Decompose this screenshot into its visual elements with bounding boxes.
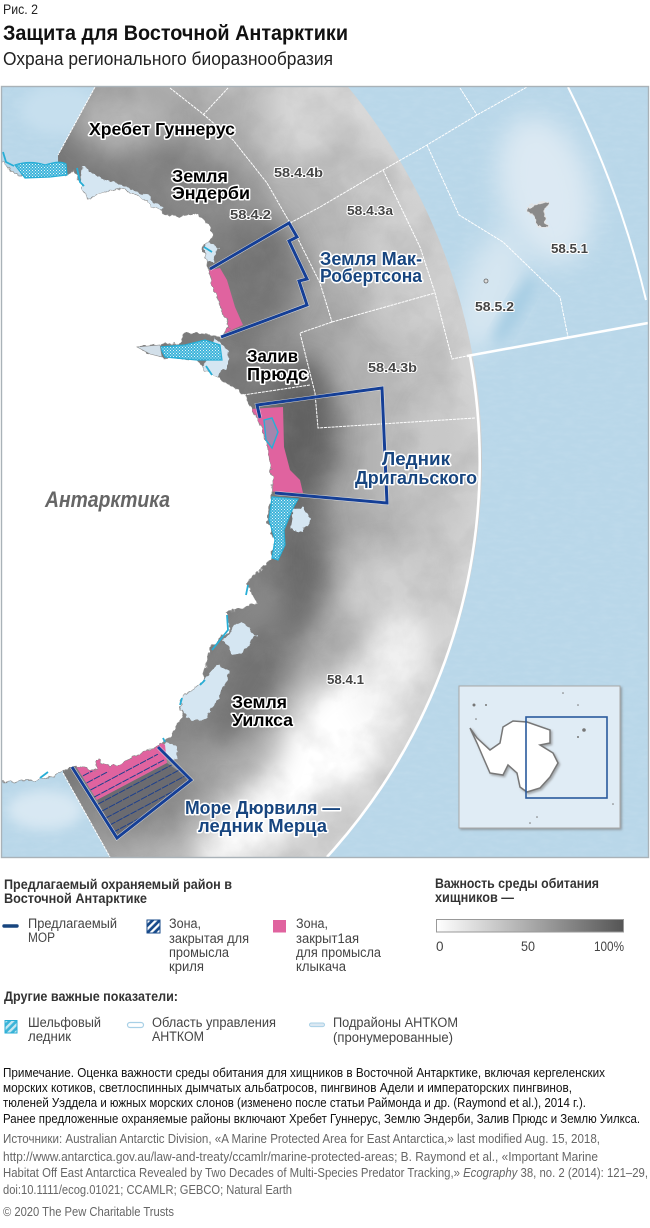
Antarctic land xyxy=(0,150,275,782)
CCAMLR management area lines xyxy=(327,87,648,857)
label: Prydz Bay xyxy=(247,346,308,384)
CCAMLR subarea lines xyxy=(58,87,568,857)
legend heading: Восточной Антарктике xyxy=(4,891,147,906)
map panel xyxy=(0,70,649,892)
legend: other features xyxy=(4,989,458,1045)
note: тюленей Уэддела и южных морских слонов (изменено после статьи Раймонда и др. (Raymond et al.), 2014 г.). xyxy=(3,1095,586,1110)
legend item: proposed MPA: Предлагаемый xyxy=(28,916,117,931)
subarea numbers: 58.4.2 xyxy=(230,208,271,222)
legend item: subareas: (пронумерованные) xyxy=(333,1030,453,1045)
legend item: ice shelf: Шельфовый xyxy=(28,1015,101,1030)
subarea numbers: 58.4.1 xyxy=(327,673,364,687)
Kerguelen Islands xyxy=(527,201,548,227)
legend heading: Предлагаемый охраняемый район в xyxy=(4,877,232,892)
legend item: krill closure: закрытая для xyxy=(169,931,249,946)
label: Wilkes Land xyxy=(232,692,293,730)
Amery west tip xyxy=(137,345,162,357)
legend: habitat importance scale xyxy=(435,876,624,954)
Heard Island xyxy=(484,279,488,283)
label: d'Urville Sea xyxy=(185,798,340,836)
seabed plateau shading xyxy=(3,88,606,834)
label: Drygalski Glacier xyxy=(355,449,477,488)
pink zone: d'Urville xyxy=(76,743,167,800)
legend item: management area xyxy=(128,1015,276,1044)
label: Prydz Bay: Прюдс xyxy=(247,364,308,384)
legend item: toothfish closure: Зона, xyxy=(296,916,328,931)
proposed MPA outlines xyxy=(72,223,387,838)
subarea numbers xyxy=(230,166,588,687)
ice shelf: west xyxy=(15,162,67,178)
label: Antarctica: Антарктика xyxy=(44,487,170,512)
map frame xyxy=(2,86,648,858)
pink zone: Mac. Robertson xyxy=(209,268,243,333)
MPA: Drygalski xyxy=(257,388,387,503)
subarea numbers: 58.4.4b xyxy=(274,166,323,180)
pink toothfish-closed zones xyxy=(72,268,303,800)
legend item: management area: Область управления xyxy=(152,1015,276,1030)
sources: doi:10.1111/ecog.01021; CCAMLR; GEBCO; Natural Earth xyxy=(3,1182,292,1197)
legend item: subareas xyxy=(310,1015,458,1045)
legend: habitat importance scale: 0 xyxy=(436,939,444,954)
label: Gunnerus Ridge: Хребет Гуннерус xyxy=(89,119,235,139)
label: Mac. Robertson Land: Робертсона xyxy=(320,266,423,286)
legend: habitat importance scale: 50 xyxy=(521,939,535,954)
ice shelf: Amery xyxy=(160,340,222,360)
sources xyxy=(3,1131,648,1197)
legend: habitat importance scale: 100% xyxy=(594,939,624,954)
label: Enderby Land: Эндерби xyxy=(172,183,250,203)
label: Prydz Bay: Залив xyxy=(247,346,298,366)
legend item: management area: АНТКОМ xyxy=(152,1029,204,1044)
ocean xyxy=(1,86,649,858)
legend: proposed protected area xyxy=(4,877,381,974)
label: d'Urville Sea: Море Дюрвиля — xyxy=(185,798,340,818)
label: Wilkes Land: Уилкса xyxy=(232,710,293,730)
inset locator map xyxy=(459,686,620,828)
label: d'Urville Sea: ледник Мерца xyxy=(198,816,328,836)
legend: habitat importance scale: Важность среды обитания xyxy=(435,876,599,891)
label: Drygalski Glacier: Ледник xyxy=(382,449,451,469)
sources: http://www.antarctica.gov.au/law-and-treaty/ccamlr/marine-protected-areas; B. Raymond et al., «Important Marine xyxy=(3,1149,598,1164)
MPA: Mac. Robertson xyxy=(210,223,307,337)
pink zone: Drygalski xyxy=(250,407,303,493)
subarea numbers: 58.4.3a xyxy=(347,204,394,218)
legend item: proposed MPA: МОР xyxy=(28,930,55,945)
label: Mac. Robertson Land: Земля Мак- xyxy=(320,249,422,269)
legend heading xyxy=(4,877,232,906)
subtitle: Охрана регионального биоразнообразия xyxy=(3,49,333,69)
label: Drygalski Glacier: Дригальского xyxy=(355,468,477,488)
legend item: krill closure xyxy=(147,916,249,974)
sources: Habitat Off East Antarctica Revealed by Two Decades of Multi-Species Predator Tracking,» Ecography 38, no. 2 (2014): 121–29, xyxy=(3,1165,648,1180)
label: Enderby Land: Земля xyxy=(172,166,228,186)
legend: other features: Другие важные показатели: xyxy=(4,989,178,1004)
legend item: toothfish closure: закрыт1ая xyxy=(296,931,359,946)
legend item: krill closure: криля xyxy=(169,959,204,974)
map labels xyxy=(44,119,588,836)
inset: Antarctica xyxy=(470,721,558,792)
note: морских котиков, светлоспинных дымчатых альбатросов, пингвинов Адели и императорских пингвинов, xyxy=(3,1080,572,1095)
subarea numbers: 58.4.3b xyxy=(368,361,417,375)
label: Mac. Robertson Land xyxy=(320,249,423,286)
legend item: krill closure: Зона, xyxy=(169,916,201,931)
inset: map extent box xyxy=(526,717,607,798)
habitat importance surface xyxy=(58,87,482,857)
figure number: Рис. 2 xyxy=(3,2,38,17)
legend item: ice shelf xyxy=(5,1015,101,1044)
subarea numbers: 58.5.1 xyxy=(551,242,588,256)
ice shelves xyxy=(15,162,298,560)
note xyxy=(3,1065,640,1126)
legend item: krill closure: промысла xyxy=(169,945,229,960)
label: Enderby Land xyxy=(172,166,250,203)
fast ice patches xyxy=(80,165,310,760)
legend item: ice shelf: ледник xyxy=(28,1029,71,1044)
label: Wilkes Land: Земля xyxy=(232,692,287,712)
legend item: subareas: Подрайоны АНТКОМ xyxy=(333,1015,458,1030)
ice shelf: south of Drygalski xyxy=(269,497,298,560)
copyright: © 2020 The Pew Charitable Trusts xyxy=(3,1204,174,1219)
legend item: toothfish closure xyxy=(273,916,381,974)
glacier over pink zone xyxy=(264,418,278,448)
inset: sub-Antarctic islands xyxy=(472,692,614,824)
subarea numbers: 58.5.2 xyxy=(475,300,514,314)
legend: habitat importance scale: хищников — xyxy=(435,890,514,905)
closed dark zone d'Urville xyxy=(97,763,191,838)
legend item: proposed MPA xyxy=(4,916,117,945)
coastal cyan glaciers xyxy=(3,152,248,778)
MPA: d'Urville xyxy=(72,747,191,838)
title: Защита для Восточной Антарктики xyxy=(3,22,348,45)
legend item: toothfish closure: клыкача xyxy=(296,959,346,974)
krill hatching xyxy=(82,754,185,832)
legend item: toothfish closure: для промысла xyxy=(296,945,381,960)
